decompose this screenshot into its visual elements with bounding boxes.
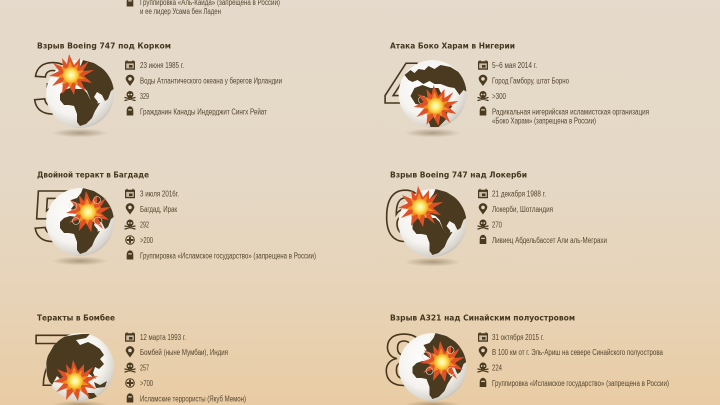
panel: attack 4: [384, 42, 649, 138]
facts: [478, 60, 649, 126]
panel: attack 6: [384, 170, 607, 266]
perpetrator text: и ее лидер Усама бен Ладен: [140, 7, 221, 16]
facts: 270: [492, 220, 502, 230]
facts: 5–6 мая 2014 г.: [492, 61, 537, 70]
globe with explosion: [46, 54, 115, 128]
number 8: 8: [384, 321, 424, 401]
title: Атака Боко Харам в Нигерии: [390, 42, 515, 50]
facts: Воды Атлантического океана у берегов Ирландии: [140, 76, 282, 86]
facts: 224: [492, 364, 502, 372]
facts: 23 июня 1985 г.: [140, 61, 184, 70]
title: Взрыв Boeing 747 под Корком: [37, 42, 171, 50]
facts: >300: [492, 92, 506, 101]
facts: 292: [140, 220, 149, 230]
number 3: 3: [33, 49, 73, 129]
panel: attack 2 remainder: [127, 0, 280, 16]
facts: 31 октября 2015 г.: [492, 333, 544, 342]
number 6: 6: [384, 177, 424, 257]
facts: [125, 60, 282, 116]
number 4: 4: [384, 49, 424, 129]
facts: >200: [140, 236, 153, 245]
facts: 257: [140, 364, 149, 372]
facts: 329: [140, 92, 149, 101]
facts: Ливиец Абдельбассет Али аль-Меграхи: [492, 236, 607, 245]
shadow: [52, 400, 108, 405]
shadow: [52, 128, 108, 138]
shadow: [404, 258, 460, 266]
number 7: 7: [33, 321, 73, 401]
title: Теракты в Бомбее: [37, 312, 116, 322]
shadow: [404, 128, 460, 138]
panel: attack 7: [33, 312, 246, 405]
facts: [478, 332, 669, 388]
facts: В 100 км от г. Эль-Ариш на севере Синайского полуострова: [492, 348, 663, 357]
facts: «Боко Харам» (запрещена в России): [492, 116, 596, 126]
globe with explosion: [398, 186, 468, 257]
facts: [125, 332, 246, 404]
facts: Багдад, Ирак: [140, 205, 177, 214]
globe with explosion: [46, 333, 114, 401]
globe with explosion: [398, 333, 468, 401]
facts: Бомбей (ныне Мумбаи), Индия: [140, 348, 228, 357]
facts: [125, 189, 316, 260]
globe with explosion: [46, 188, 115, 256]
perpetrator text: [140, 0, 280, 16]
shadow: [52, 256, 108, 266]
facts: 3 июля 2016г.: [140, 190, 179, 198]
facts: Группировка «Исламское государство» (запрещена в России): [492, 379, 669, 388]
panel: attack 8: [384, 314, 669, 405]
panel: attack 5: [33, 170, 316, 266]
facts: 21 декабря 1988 г.: [492, 190, 546, 198]
facts: Гражданин Канады Индерджит Сингх Рейат: [140, 108, 267, 116]
title: Взрыв Boeing 747 над Локерби: [390, 170, 527, 180]
facts: Радикальная нигерийская исламистская организация: [492, 108, 649, 116]
facts: Группировка «Исламское государство» (запрещена в России): [140, 252, 316, 260]
facts: Локерби, Шотландия: [492, 205, 553, 214]
facts: >700: [140, 379, 153, 388]
facts: Исламские террористы (Якуб Мемон): [140, 394, 246, 404]
number 5: 5: [33, 177, 73, 257]
facts: 12 марта 1993 г.: [140, 333, 186, 342]
title: Взрыв А321 над Синайским полуостровом: [390, 314, 575, 322]
shadow: [404, 400, 460, 405]
panel: attack 3: [33, 42, 282, 138]
icon: balaclava: [127, 0, 133, 7]
facts: Город Гамбору, штат Борно: [492, 76, 569, 86]
globe with explosion: [398, 60, 468, 128]
facts: [478, 189, 607, 245]
title: Двойной теракт в Багдаде: [37, 170, 150, 180]
